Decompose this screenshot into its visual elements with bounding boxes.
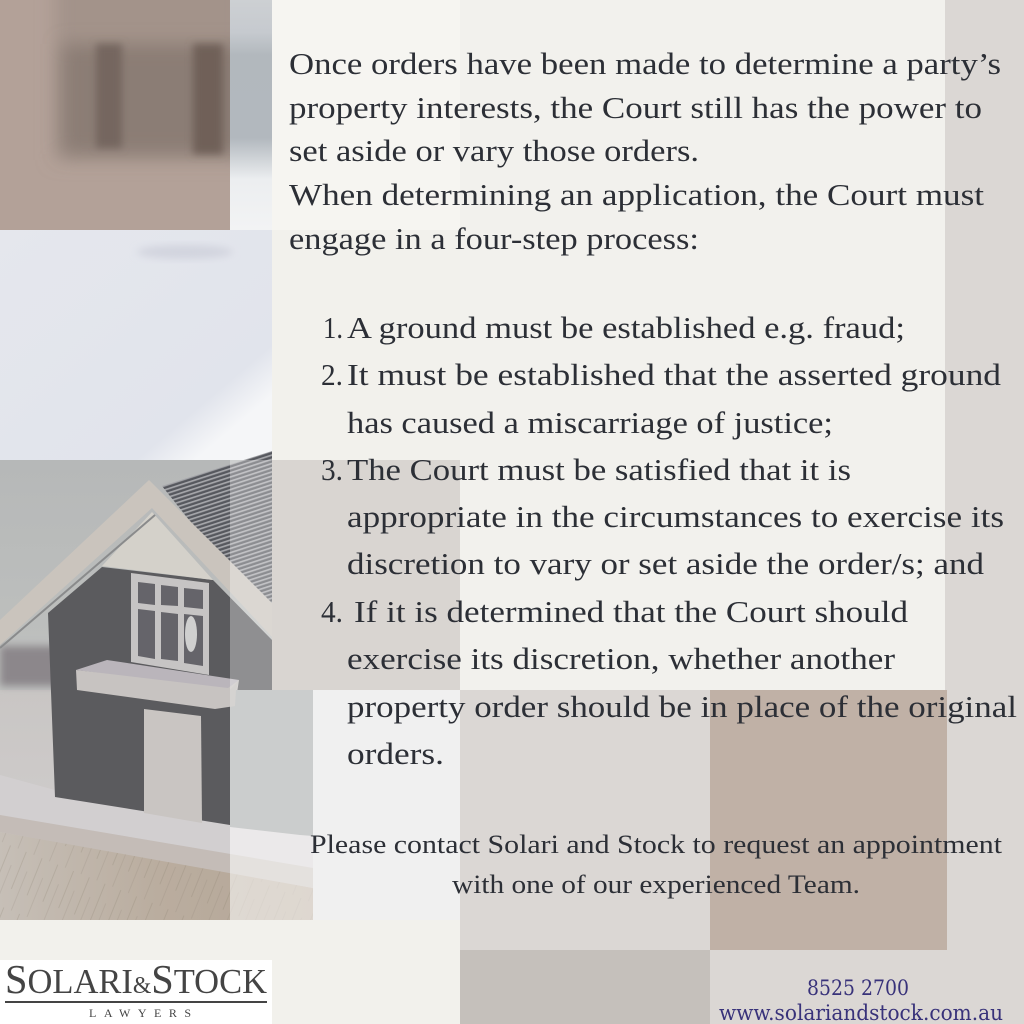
panel: taupe block — [710, 690, 947, 950]
panel: top cream column — [272, 0, 460, 230]
text block: contact details: 8525 2700 — [807, 976, 909, 1001]
house: wood floor — [0, 832, 313, 920]
list: four-step process: A ground must be established e.g. fraud; — [347, 310, 905, 345]
overlay: grey box over house — [230, 690, 313, 836]
text block: introduction: property interests, the Court still has the power to — [289, 90, 982, 125]
overlay: balcony tip — [230, 680, 239, 707]
list: four-step process: 3. — [321, 452, 343, 487]
list: four-step process — [321, 310, 1017, 771]
panel: lower grey block — [460, 690, 710, 950]
list: four-step process: 1. — [323, 310, 343, 345]
panel: blurred grey photo strip — [230, 0, 272, 230]
text block: introduction: Once orders have been made to determine a party’s — [289, 46, 1001, 81]
text block: introduction: set aside or vary those orders. — [289, 133, 699, 168]
house: roof trim — [0, 480, 272, 645]
house: balcony — [76, 660, 239, 709]
house: door — [144, 709, 202, 823]
list: four-step process: 2. — [321, 357, 343, 392]
text block: introduction — [289, 46, 1001, 256]
house: roof shingles — [162, 451, 272, 606]
text block: introduction: When determining an application, the Court must — [289, 177, 984, 212]
text block: call to action: Please contact Solari and Stock to request an appointment — [310, 829, 1003, 859]
logo: LAWYERS — [89, 1006, 191, 1020]
panel: middle grey block — [272, 460, 460, 690]
list: four-step process: 4. — [321, 594, 343, 629]
panel: upper centre block — [460, 0, 945, 690]
house: window — [131, 573, 209, 675]
panel: taupe blurred photo — [0, 0, 252, 230]
list: four-step process: The Court must be satisfied that it is — [347, 452, 851, 487]
panel: blurred paper photo — [0, 230, 272, 460]
text block: call to action: with one of our experienced Team. — [452, 869, 860, 899]
overlay: pale panel over base — [230, 827, 313, 920]
overlay: lighter strip over house — [230, 460, 272, 690]
list: four-step process: It must be established that the asserted ground — [347, 357, 1002, 392]
list: four-step process: discretion to vary or set aside the order/s; and — [347, 546, 985, 581]
house: base front edge — [0, 815, 313, 888]
house: base — [0, 775, 313, 868]
list: four-step process: property order should be in place of the original — [347, 689, 1017, 724]
list: four-step process: exercise its discretion, whether another — [347, 641, 896, 676]
panel: pale contact block — [313, 690, 460, 920]
list: four-step process: appropriate in the circumstances to exercise its — [347, 499, 1004, 534]
logo — [0, 956, 272, 1024]
house: gable — [102, 512, 213, 580]
text block: contact details — [719, 976, 1003, 1024]
panel: right grey column — [945, 0, 1024, 950]
panel: footer dark block — [460, 950, 710, 1024]
logo: SOLARI&STOCK — [5, 956, 267, 1002]
text block: introduction: engage in a four-step process: — [289, 221, 699, 256]
house: roof shadow line — [0, 515, 155, 648]
text block: call to action — [310, 829, 1003, 899]
list: four-step process: orders. — [347, 736, 444, 771]
list: four-step process: If it is determined that the Court should — [354, 594, 909, 629]
panel: footer contact block — [710, 950, 1024, 1024]
photo: model house — [0, 451, 313, 920]
list: four-step process: has caused a miscarriage of justice; — [347, 405, 833, 440]
house: dark wall — [48, 567, 272, 825]
